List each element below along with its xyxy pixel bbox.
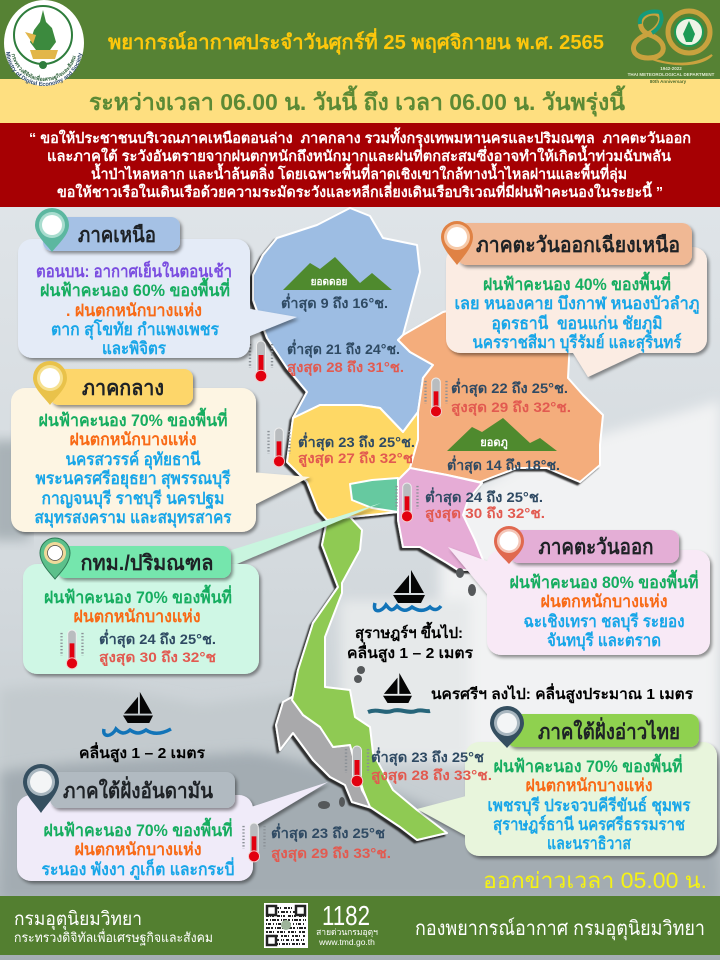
text: northeast: นครราชสีมา บุรีรัมย์ และสุรินทร์	[472, 332, 682, 353]
region: south gulf (green)	[292, 517, 447, 840]
temperature: south gulf: ต่ำสุด 23 ถึง 25°ช	[371, 747, 485, 766]
icon: pin south andaman	[23, 764, 59, 813]
heading: northeast: ภาคตะวันออกเฉียงเหนือ	[476, 233, 680, 257]
text: bangkok: ฝนตกหนักบางแห่ง	[74, 607, 200, 626]
temperature: north: ต่ำสุด 21 ถึง 24°ช.	[287, 339, 400, 358]
text: central: สมุทรสงคราม และสมุทรสาคร	[34, 508, 232, 528]
mountain: phu peak: ยอดภู	[480, 437, 508, 450]
text: north: และพิจิตร	[102, 339, 167, 358]
text: gulf north waves: คลื่นสูง 1 – 2 เมตร	[347, 642, 474, 663]
footer: QR code	[264, 903, 308, 948]
logo: 80th anniversary: 1942-2022	[660, 66, 682, 71]
connector: bangkok callout	[225, 503, 381, 566]
heading: south andaman	[50, 772, 235, 808]
heading: north: ภาคเหนือ	[78, 223, 156, 247]
icon: pin east	[494, 526, 524, 564]
thermometer: northeast	[426, 378, 446, 417]
bubble: bangkok	[23, 564, 259, 674]
islands	[318, 568, 476, 809]
text: east: ฉะเชิงเทรา ชลบุรี ระยอง	[524, 611, 684, 632]
bubble: south gulf	[417, 742, 717, 856]
temperature: bangkok: ต่ำสุด 24 ถึง 25°ช.	[99, 629, 216, 648]
logo: ministry emblem: Ministry of Digital Economy and Society	[6, 52, 83, 86]
text: northeast: เลย หนองคาย บึงกาฬ หนองบัวลำภู	[454, 294, 700, 315]
bubble: east	[448, 547, 710, 655]
warning banner: และภาคใต้ ระวังอันตรายจากฝนตกหนักถึงหนักมากและฝนที่ตกสะสมซึ่งอาจทำให้เกิดน้ำท่วมฉับพลัน	[47, 145, 671, 165]
temperature: central: สูงสุด 27 ถึง 32°ช	[298, 450, 414, 467]
temperature: north: สูงสุด 28 ถึง 31°ช.	[287, 359, 404, 376]
temperature: bangkok	[99, 629, 217, 666]
issue time: ออกข่าวเวลา 05.00 น.	[483, 868, 707, 893]
temperature: northeast	[451, 378, 571, 416]
icon: pin north	[35, 208, 69, 252]
logo: 80th anniversary: 80th Anniversary	[650, 79, 687, 84]
title: พยากรณ์อากาศประจำวันศุกร์ที่ 25 พฤศจิกายน พ.ศ. 2565	[108, 27, 604, 55]
warning banner: “ ขอให้ประชาชนบริเวณภาคเหนือตอนล่าง ภาคกลาง รวมทั้งกรุงเทพมหานครและปริมณฑล ภาคตะวันออก	[29, 127, 691, 147]
region: northeast (orange)	[398, 300, 603, 482]
text: north: ตอนบน: อากาศเย็นในตอนเช้า	[36, 259, 232, 281]
thermometer: north	[250, 341, 272, 382]
time range band	[0, 79, 720, 123]
text: south andaman: ฝนตกหนักบางแห่ง	[74, 840, 202, 859]
heading: bangkok	[57, 546, 231, 578]
temperature: northeast: ต่ำสุด 22 ถึง 25°ช.	[451, 378, 568, 397]
heading: central: ภาคกลาง	[82, 377, 164, 400]
heading: bangkok: กทม./ปริมณฑล	[80, 552, 214, 575]
panel: east	[448, 526, 710, 655]
text: east	[510, 569, 698, 651]
temperature: south andaman	[271, 823, 391, 862]
thermometer: south gulf	[346, 746, 368, 787]
temperature: south gulf: สูงสุด 28 ถึง 33°ช.	[371, 767, 492, 784]
icon: pin central	[33, 361, 67, 405]
text: gulf north waves: สุราษฎร์ฯ ขึ้นไป:	[355, 621, 463, 643]
panel: south andaman	[17, 764, 328, 881]
text: south gulf: ฝนฟ้าคะนอง 70% ของพื้นที่	[494, 753, 682, 776]
temperature: east	[425, 487, 545, 522]
text: gulf south waves: นครศรีฯ ลงไป: คลื่นสูงประมาณ 1 เมตร	[431, 683, 694, 704]
warning banner	[0, 123, 720, 207]
text: south andaman	[42, 817, 234, 881]
footer	[0, 896, 720, 955]
header band	[0, 0, 720, 79]
temperature: phu peak: ต่ำสุด 14 ถึง 18°ช.	[447, 455, 560, 474]
footer: hotline: สายด่วนกรมอุตุฯ	[316, 927, 378, 938]
heading: central	[50, 369, 193, 405]
bubble: north	[18, 239, 297, 358]
text: central: ฝนตกหนักบางแห่ง	[70, 430, 196, 449]
heading: south andaman: ภาคใต้ฝั่งอันดามัน	[63, 775, 214, 803]
icon: pin south gulf	[490, 706, 524, 748]
icon: pin bangkok	[40, 538, 70, 579]
text: north	[36, 259, 232, 358]
heading: south gulf	[507, 714, 699, 747]
text: north: ตาก สุโขทัย กำแพงเพชร	[51, 319, 220, 340]
panel: north	[18, 208, 297, 358]
logo: 80th anniversary	[628, 11, 715, 84]
thermometer: south andaman	[244, 823, 264, 862]
region: south andaman (grey)	[276, 697, 372, 808]
text: central: กาญจนบุรี ราชบุรี นครปฐม	[42, 488, 224, 510]
text: south gulf	[488, 753, 691, 853]
temperature: south andaman: ต่ำสุด 23 ถึง 25°ช	[271, 823, 386, 842]
text: andaman waves: คลื่นสูง 1 – 2 เมตร	[79, 742, 206, 763]
footer: department name: กรมอุตุนิยมวิทยา	[14, 909, 142, 931]
logo: 80th anniversary: THAI METEOROLOGICAL DEPARTMENT	[628, 72, 715, 77]
panel: northeast	[441, 221, 707, 377]
region: bangkok metropolitan (mint)	[350, 478, 398, 512]
text: gulf north waves	[347, 621, 474, 663]
temperature: northeast: สูงสุด 29 ถึง 32°ช.	[451, 399, 571, 416]
time range band: ระหว่างเวลา 06.00 น. วันนี้ ถึง เวลา 06.00 น. วันพรุ่งนี้	[89, 85, 626, 117]
text: northeast: ฝนฟ้าคะนอง 40% ของพื้นที่	[483, 271, 671, 294]
text: east: ฝนตกหนักบางแห่ง	[540, 592, 668, 611]
text: south andaman: ฝนฟ้าคะนอง 70% ของพื้นที่	[44, 817, 232, 840]
mountain: doi peak: ยอดดอย	[311, 277, 348, 288]
temperature: central	[298, 432, 415, 467]
region: central (yellow)	[287, 405, 418, 520]
mountain: doi peak	[283, 257, 392, 290]
text: south gulf: สุราษฎร์ธานี นครศรีธรรมราช	[493, 814, 685, 835]
footer: department name: กระทรวงดิจิทัลเพื่อเศรษฐกิจและสังคม	[14, 929, 213, 946]
text: south andaman: ระนอง พังงา ภูเก็ต และกระบี่	[42, 857, 234, 881]
footer: department name	[14, 909, 213, 946]
heading: south gulf: ภาคใต้ฝั่งอ่าวไทย	[538, 716, 680, 744]
text: central: นครสวรรค์ อุทัยธานี	[66, 449, 201, 470]
thermometer: central	[269, 428, 289, 467]
text: south gulf: และนราธิวาส	[547, 834, 632, 853]
heading: east: ภาคตะวันออก	[538, 536, 654, 559]
temperature: north	[287, 339, 404, 376]
panel: bangkok	[23, 538, 259, 674]
bubble: central	[11, 388, 310, 532]
icon: boat gulf north	[374, 570, 441, 611]
region: north (blue)	[253, 208, 433, 432]
temperature: east: สูงสุด 30 ถึง 32°ช.	[425, 505, 545, 522]
temperature: south andaman: สูงสุด 29 ถึง 33°ช.	[271, 845, 391, 862]
icon: boat andaman	[104, 692, 171, 735]
text: east: จันทบุรี และตราด	[547, 630, 661, 651]
bubble: south andaman	[17, 782, 328, 881]
heading: east	[510, 530, 679, 563]
text: northeast	[454, 271, 700, 353]
footer: hotline	[316, 900, 378, 947]
temperature: doi peak: ต่ำสุด 9 ถึง 16°ช.	[281, 293, 388, 312]
text: south gulf: ฝนตกหนักบางแห่ง	[526, 776, 652, 795]
panel: south gulf	[417, 706, 717, 856]
panel: central	[11, 361, 310, 532]
temperature: bangkok: สูงสุด 30 ถึง 32°ช	[99, 649, 217, 666]
heading: northeast	[457, 223, 692, 265]
warning banner: ขอให้ชาวเรือในเดินเรือด้วยความระมัดระวังและหลีกเลี่ยงเดินเรือบริเวณที่มีฝนฟ้าคะนองในระยะนี้ ”	[57, 181, 663, 201]
text: bangkok: ฝนฟ้าคะนอง 70% ของพื้นที่	[44, 584, 232, 607]
icon: pin northeast	[441, 221, 473, 265]
icon: boat gulf south	[368, 673, 430, 712]
text: central: พระนครศรีอยุธยา สุพรรณบุรี	[36, 468, 231, 489]
background: misty mountains	[0, 207, 720, 960]
thermometer: east	[397, 483, 417, 522]
text: south gulf: เพชรบุรี ประจวบคีรีขันธ์ ชุมพร	[488, 795, 691, 816]
text: east: ฝนฟ้าคะนอง 80% ของพื้นที่	[510, 569, 698, 592]
temperature: central: ต่ำสุด 23 ถึง 25°ช.	[298, 432, 415, 451]
temperature: east: ต่ำสุด 24 ถึง 25°ช.	[425, 487, 543, 506]
text: north: ฝนฟ้าคะนอง 60% ของพื้นที่	[40, 277, 230, 300]
map of Thailand	[253, 208, 603, 840]
mountain: phu peak	[447, 418, 557, 451]
temperature: south gulf	[371, 747, 492, 784]
text: central: ฝนฟ้าคะนอง 70% ของพื้นที่	[38, 407, 228, 430]
text: northeast: อุดรธานี ขอนแก่น ชัยภูมิ	[492, 313, 662, 335]
footer: hotline: www.tmd.go.th	[318, 937, 375, 947]
warning banner: น้ำป่าไหลหลาก และน้ำล้นตลิ่ง โดยเฉพาะพื้นที่ลาดเชิงเขาใกล้ทางน้ำไหลผ่านและพื้นที่ลุ่ม	[91, 163, 627, 183]
thermometer: bangkok	[62, 630, 82, 669]
footer: hotline: 1182	[322, 900, 370, 931]
logo: ministry emblem: กระทรวงดิจิทัลเพื่อเศรษฐกิจและสังคม	[12, 54, 76, 82]
heading: north	[43, 217, 180, 251]
text: north: . ฝนตกหนักบางแห่ง	[66, 301, 202, 320]
text: central	[34, 407, 232, 528]
text: bangkok	[44, 584, 232, 626]
bubble: northeast	[446, 247, 707, 377]
logo: ministry emblem	[4, 0, 84, 86]
region: east (pink)	[398, 468, 487, 570]
